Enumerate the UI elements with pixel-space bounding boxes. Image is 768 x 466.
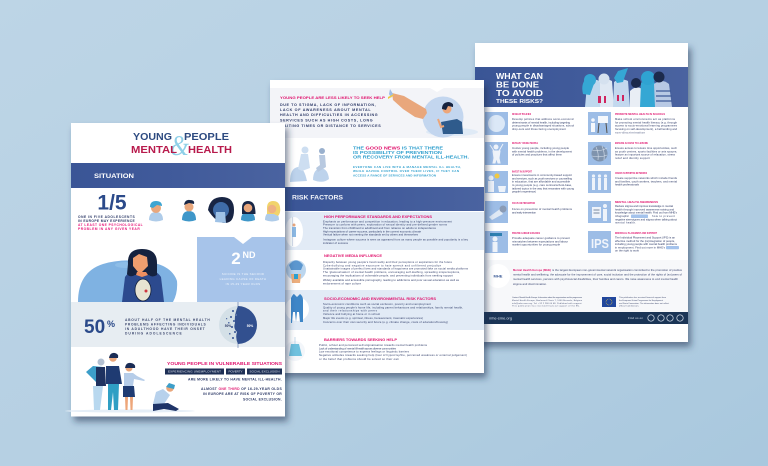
icon: [285, 294, 309, 323]
footer: about mental health europe: mental health and wellbeing, the advocate for the improvement of care, social inclusion and the protection of the rights of (ex)users of: [513, 272, 682, 276]
risk: socio-economic: Quality of young people's home life, including parent behaviours and relationships, family mental health,: [323, 305, 463, 309]
chart: half circle: 50%: [225, 324, 231, 328]
chips: [165, 368, 282, 374]
panel: less likely to seek help: YOUNG PEOPLE ARE LESS LIKELY TO SEEK HELP: [280, 96, 386, 100]
item: promote mental health in schools: non-discrimination: [615, 130, 646, 134]
risk: socio-economic: SOCIO-ECONOMIC AND ENVIRONMENTAL RISK FACTORS: [324, 297, 437, 301]
title: MENTAL: [131, 145, 177, 156]
risk: socio-economic: Violence and bullying at home or in school: [323, 312, 380, 316]
band: risk factors: [285, 187, 484, 211]
item: focus on prevention: FOCUS ON PREVENTION: [512, 201, 535, 205]
item: individual placement and support: on the right to work: [615, 249, 640, 253]
logo: MHE: [494, 274, 503, 278]
item: involve young people: Involve young people, including young people: [512, 146, 570, 150]
funding notes: info@mhe-sme.org. Tel: +32 2 280 04 68. Published with support.: [512, 302, 582, 305]
panel: less likely to seek help: [270, 88, 484, 138]
risk: negative media influence: NEGATIVE MEDIA INFLUENCE: [324, 254, 383, 258]
panel: less likely to seek help: WAITING TIMES OR DISTANCE TO SERVICES: [280, 124, 381, 128]
footer: about mental health europe: mental health services, persons with psychosocial disabilities, their families and carers. We raise awareness to end mental health: [513, 277, 678, 281]
item: promote mental health in schools: [588, 112, 678, 135]
page 2: risks: [270, 80, 484, 373]
heading: good news: IS POSSIBILITY OF PREVENTION: [353, 150, 443, 156]
item: develop policies: young people in disadvantaged situations, school: [512, 124, 574, 128]
illustration: hand reaching to person: [388, 89, 478, 138]
item: mental health awareness: knowledge about mental health. Find out from MHE's: [615, 211, 678, 215]
item: mental health awareness: [588, 200, 678, 225]
item: individual placement and support: including young people with mental health problems: [615, 242, 678, 246]
item: develop policies: drop-outs and those facing unemployment: [512, 127, 566, 131]
item: mental health awareness: mental health.: [615, 221, 636, 225]
panel: vulnerable situations: ALMOST ONE THIRD OF 16-29-YEAR OLDS: [201, 387, 282, 391]
footer: about mental health europe: [484, 260, 688, 324]
EU flag: [602, 297, 616, 307]
chips: POVERTY: [228, 370, 242, 374]
item: ensure access to leisure: Ensure access to leisure time opportunities, such: [615, 146, 678, 150]
panel: second leading cause: [197, 237, 285, 302]
risk: high performance: High expectations of career success, particularly in the current economic climate: [323, 229, 422, 233]
item: mental health awareness: health through improved awareness-raising and: [615, 207, 674, 211]
chips: EXPERIENCING UNEMPLOYMENT: [168, 370, 221, 374]
social icons: [648, 315, 683, 321]
funding notes: This publication has received financial support of the EU.: [512, 304, 580, 308]
EU note: the European Union Programme for Employment: [619, 299, 663, 302]
risk: socio-economic: and their relationships with peers: [323, 309, 378, 313]
risk: barriers: Negative attitudes towards seeking help (fear of hypocrisy/the, perceived weakness or external judgement): [319, 353, 467, 357]
item: mental health awareness: negative stereotypes and stigma when talking about: [615, 217, 677, 221]
dark footer bar: mhe-sme.org: [489, 316, 512, 320]
panel: less likely to seek help: SERVICES SUCH AS HIGH COSTS, LONG: [280, 118, 373, 122]
item: invest in support: to young people (e.g. care centres/school-base,: [512, 183, 572, 187]
logo: [486, 264, 510, 288]
panel: fifty percent: ABOUT HALF OF THE MENTAL HEALTH: [125, 318, 210, 322]
item: mental health awareness: infographic: [615, 214, 630, 218]
icon: [285, 217, 303, 247]
title: [131, 131, 232, 162]
item: ensure access to leisure: [588, 141, 678, 165]
panel: vulnerable situations: IN EUROPE ARE AT RISK OF POVERTY OR: [203, 392, 282, 396]
item: promote mental health in schools: for promoting mental health literacy (e.g. through: [615, 120, 678, 124]
item: provide career guidance: PROVIDE CAREER GUIDANCE: [512, 231, 540, 235]
panel: vulnerable situations: YOUNG PEOPLE IN VULNERABLE SITUATIONS: [167, 361, 282, 366]
chart: half circle: 50%: [247, 324, 253, 328]
header band: [475, 67, 688, 107]
EU note: official Commission.: [619, 306, 639, 308]
item: develop policies: determinants of mental health, including targeting: [512, 120, 570, 124]
EU note: This publication has received financial support from: [619, 296, 666, 299]
risk: negative media influence: [286, 254, 469, 286]
stat: one in five: 1/5: [97, 192, 127, 214]
icon: [285, 337, 305, 361]
heading: good news: THE GOOD NEWS IS THAT THERE: [353, 146, 444, 152]
item: individual placement and support: IPS: [591, 236, 609, 251]
item: mental health awareness: MENTAL HEALTH AWARENESS: [615, 200, 658, 204]
illustration: group of young people: [65, 353, 195, 412]
item: focus on prevention: Focus on prevention of mental health problems: [512, 207, 573, 211]
item: invest in support: tailored topics in the way that resonates with young: [512, 186, 574, 190]
risk: negative media influence: The 'glamourisation' of mental health problems, encouraging self-loathing, spreading misperceptions,: [323, 270, 460, 274]
stat: one in five: [78, 192, 143, 231]
item: promote mental health in schools: PROMOTE MENTAL HEALTH IN SCHOOLS: [615, 112, 665, 116]
item: mental health awareness: how to prevent: [652, 214, 675, 218]
item: focus on prevention: [485, 201, 573, 223]
risk: barriers: Lack of understanding of mental ill-health across diverse communities: [319, 346, 397, 350]
item: invest in support: in education, that are affordable and accessible: [512, 180, 570, 184]
panel: vulnerable situations: SOCIAL EXCLUSION.: [243, 398, 282, 402]
item: create supportive networks: and families, youth workers, teachers, and mental: [615, 179, 677, 183]
footer: about mental health europe: stigma and discrimination.: [513, 282, 547, 286]
item: focus on prevention: and early intervention: [512, 210, 536, 214]
risk: negative media influence: Cyberbullying and negative exposure to hate speech and unfiltered prejudice: [323, 263, 442, 267]
risk: socio-economic: [285, 290, 484, 330]
heading: good news: [353, 146, 469, 160]
risk: high performance: The transition from childhood to adulthood and from reliance on adults to independence: [323, 226, 436, 230]
title: HEALTH: [188, 145, 232, 156]
item: invest in support: people's experience): [512, 190, 536, 194]
panel: fifty percent: DURING ADOLESCENCE: [125, 332, 182, 336]
item: create supportive networks: Create supportive networks which include friends: [615, 176, 678, 180]
item: ensure access to leisure: ENSURE ACCESS TO LEISURE: [615, 141, 648, 145]
panel: less likely to seek help: HEALTH AND DIFFICULTIES IN ACCESSING: [280, 113, 378, 117]
heading: good news: OR RECOVERY FROM MENTAL ILL-HEALTH.: [353, 154, 469, 160]
risk: negative media influence: Unattainable images of perfect lives and standards of happiness are promoted fake on social media platforms: [323, 267, 469, 271]
text: good news body: WHILE HAVING CONTROL OVER THEIR LIVES, IF THEY CAN: [353, 169, 459, 173]
icon: [286, 260, 306, 283]
risk: high performance: Pressure to conform with peers, exploration of sexual identity and pre-defined gender norms: [323, 223, 448, 227]
risk: negative media influence: Disparity between young people's lived reality and their perceptions or aspirations for the future: [323, 260, 452, 264]
chips: SOCIAL EXCLUSION: [250, 370, 280, 374]
item: involve young people: [485, 141, 572, 165]
item: mental health awareness: Reduce stigma and improve knowledge in mental: [615, 204, 673, 208]
panel: less likely to seek help: LACK OF AWARENESS ABOUT MENTAL: [280, 108, 371, 112]
item: individual placement and support: [588, 231, 679, 253]
heading: what can be done: TO AVOID: [496, 88, 543, 98]
heading: what can be done: WHAT CAN: [496, 71, 543, 81]
funding notes: [512, 296, 583, 308]
item: provide career guidance: market opportunities for young people: [512, 243, 560, 247]
dark footer bar: Find us on: [628, 316, 643, 320]
stat: one in five: AT LEAST ONE PSYCHOLOGICAL: [78, 223, 143, 227]
item: individual placement and support: in employment. Find out more in MHE's: [615, 245, 666, 249]
risk: socio-economic: Concerns over their own security and future (e.g. climate change, costs of education/housing): [323, 320, 448, 324]
item: individual placement and support: The Individual Placement and Support (IPS) is an: [615, 236, 676, 240]
text: good news body: EVERYONE CAN LIVE WITH & MANAGE MENTAL ILL HEALTH,: [353, 165, 461, 169]
risk: barriers: Public, school and perceived self-stigmatisation towards mental health problems: [319, 343, 428, 347]
column 1 actions: [485, 112, 575, 253]
page 3: what can be done: [475, 43, 688, 342]
panel: fifty percent: IN ADULTHOOD HAVE THEIR ONSET: [125, 327, 205, 331]
item: develop policies: [485, 112, 575, 135]
item: provide career guidance: [485, 231, 570, 253]
page 1: situation: [65, 123, 285, 416]
item: involve young people: INVOLVE YOUNG PEOPLE: [512, 141, 538, 145]
risk: barriers: Low emotional competence to express feelings or linguistic barriers: [319, 350, 410, 354]
item: invest in support: INVEST IN SUPPORT: [512, 170, 532, 174]
illustration: two people talking: [290, 146, 329, 182]
item: involve young people: with mental health problems, in the development: [512, 149, 572, 153]
band: situation: SITUATION: [94, 174, 134, 180]
footer: about mental health europe: Mental Health Europe (MHE) is the largest European non-governmental network organisation committed to the promotion of positive: [513, 268, 682, 272]
panel: good news: [285, 138, 484, 185]
risk: high performance: [285, 212, 484, 250]
risk: negative media influence: Widely available and accessible pornography, leading to addictions and poor sexual education as well as: [323, 278, 460, 282]
stat: one in five: IN EUROPE MAY EXPERIENCE: [78, 219, 136, 223]
heading: what can be done: [496, 71, 543, 105]
panel: vulnerable situations: [65, 353, 282, 412]
risk: high performance: Instagram culture where success is seen as appeared from as many people as possible and popularity is a key: [323, 237, 469, 241]
risk: high performance: HIGH PERFORMANCE STANDARDS AND EXPECTATIONS: [324, 215, 433, 219]
risk: socio-economic: Major life events (e.g. spiritual, illness, bereavement, traumatic experiences): [323, 316, 423, 320]
risk: barriers: BARRIERS TOWARDS SEEKING HELP: [324, 338, 398, 342]
stat: one in five: ONE IN FIVE ADOLESCENTS: [78, 215, 136, 219]
funding notes: Contact: Mental Health Europe. Information about the organisation and its programme: [512, 296, 583, 299]
risk: socio-economic: Socio-economic conditions such as social exclusion, poverty and unemployment: [323, 302, 431, 306]
panel: vulnerable situations: ARE MORE LIKELY TO HAVE MENTAL ILL-HEALTH.: [188, 378, 282, 382]
risk: high performance: indicator of success: [323, 241, 349, 245]
item: create supportive networks: CREATE SUPPORTIVE NETWORKS: [615, 171, 647, 175]
item: individual placement and support: INDIVIDUAL PLACEMENT AND SUPPORT: [615, 231, 657, 235]
title: PEOPLE: [184, 132, 229, 143]
item: involve young people: of policies and practices that affect them: [512, 153, 563, 157]
EU note: [619, 296, 669, 308]
heading: what can be done: BE DONE: [496, 80, 539, 90]
item: ensure access to leisure: feature an important source of relaxation, stress: [615, 153, 676, 157]
dark footer bar: [484, 312, 688, 324]
panel: second leading cause: 2: [231, 249, 241, 268]
text: good news body: [353, 165, 461, 178]
band: risk factors: RISK FACTORS: [292, 196, 343, 202]
panel: fifty percent: PROBLEMS AFFECTING INDIVIDUALS: [125, 322, 206, 326]
panel: fifty percent: [71, 302, 285, 348]
panel: second leading cause: ND: [242, 250, 256, 260]
text: good news body: ACCESS A RANGE OF SERVICES AND INFORMATION: [353, 174, 436, 178]
item: ensure access to leisure: relief and identity support: [615, 156, 650, 160]
item: individual placement and support: effective method for the (re)integration of people,: [615, 239, 675, 243]
panel: fifty percent: 50: [84, 317, 105, 338]
item: create supportive networks: [588, 171, 678, 193]
illustration: woman with mirror: [78, 249, 177, 302]
panel: less likely to seek help: DUE TO STIGMA, LACK OF INFORMATION,: [280, 103, 376, 107]
panel: second leading cause: LEADING CAUSE OF DEATH: [220, 277, 266, 281]
item: create supportive networks: health professionals: [615, 183, 640, 187]
heading: what can be done: THESE RISKS?: [496, 99, 543, 105]
item: promote mental health in schools: access to socio-emotional learning programmes: [615, 124, 678, 128]
item: invest in support: Ensure investments in community-based support: [512, 173, 572, 177]
item: promote mental health in schools: Make school environments act as platforms: [615, 117, 676, 121]
risk: high performance: Vertical failure when not meeting the standards set by others and themselves: [323, 233, 419, 237]
item: provide career guidance: mismatches between expectations and labour: [512, 239, 568, 243]
risk: negative media influence: encouraging the implications of vulnerable people, and preventing individuals from seeking support: [323, 273, 453, 277]
EU note: and Social Innovation. The information does not reflect: [619, 302, 669, 305]
risk: barriers: or the belief that problems should be solved on their own: [319, 357, 400, 361]
item: invest in support: and services, such as youth services or counselling: [512, 176, 572, 180]
illustration: sitting young person: [143, 383, 187, 412]
item: develop policies: Develop policies that address socio-economic: [512, 117, 575, 121]
item: promote mental health in schools: focusing on self-development), a befriending and: [615, 127, 678, 131]
item: ensure access to leisure: as youth centres, sports facilities or arts spaces;: [615, 149, 677, 153]
band: situation: [71, 163, 285, 188]
risk: negative media influence: endorsement of rape culture: [323, 282, 362, 286]
funding notes: Mental Health Europe, Boulevard Clovis 7, 1000 Brussels, Belgium: [512, 299, 582, 302]
panel: second leading cause: IN 15-29 YEAR OLDS: [226, 282, 260, 286]
icons: five young people: [149, 197, 280, 223]
stat: one in five: PROBLEM IN ANY GIVEN YEAR: [78, 227, 140, 231]
panel: second leading cause: SUICIDE IS THE SECOND: [222, 272, 265, 276]
item: provide career guidance: Provide adequate career guidance to prevent: [512, 236, 570, 240]
risk: barriers: [285, 337, 467, 361]
risk: high performance: Emphasis on performance and competition in education, leading to a high-pressure environment: [323, 220, 452, 224]
title: YOUNG: [133, 132, 172, 143]
illustration: group of friends: [582, 68, 672, 107]
item: develop policies: DEVELOP POLICIES: [512, 112, 531, 116]
panel: fifty percent: %: [107, 319, 115, 329]
title: &: [170, 131, 189, 162]
column 2 actions: [588, 112, 679, 253]
chart: half circle: [219, 302, 257, 348]
item: invest in support: [485, 170, 574, 194]
